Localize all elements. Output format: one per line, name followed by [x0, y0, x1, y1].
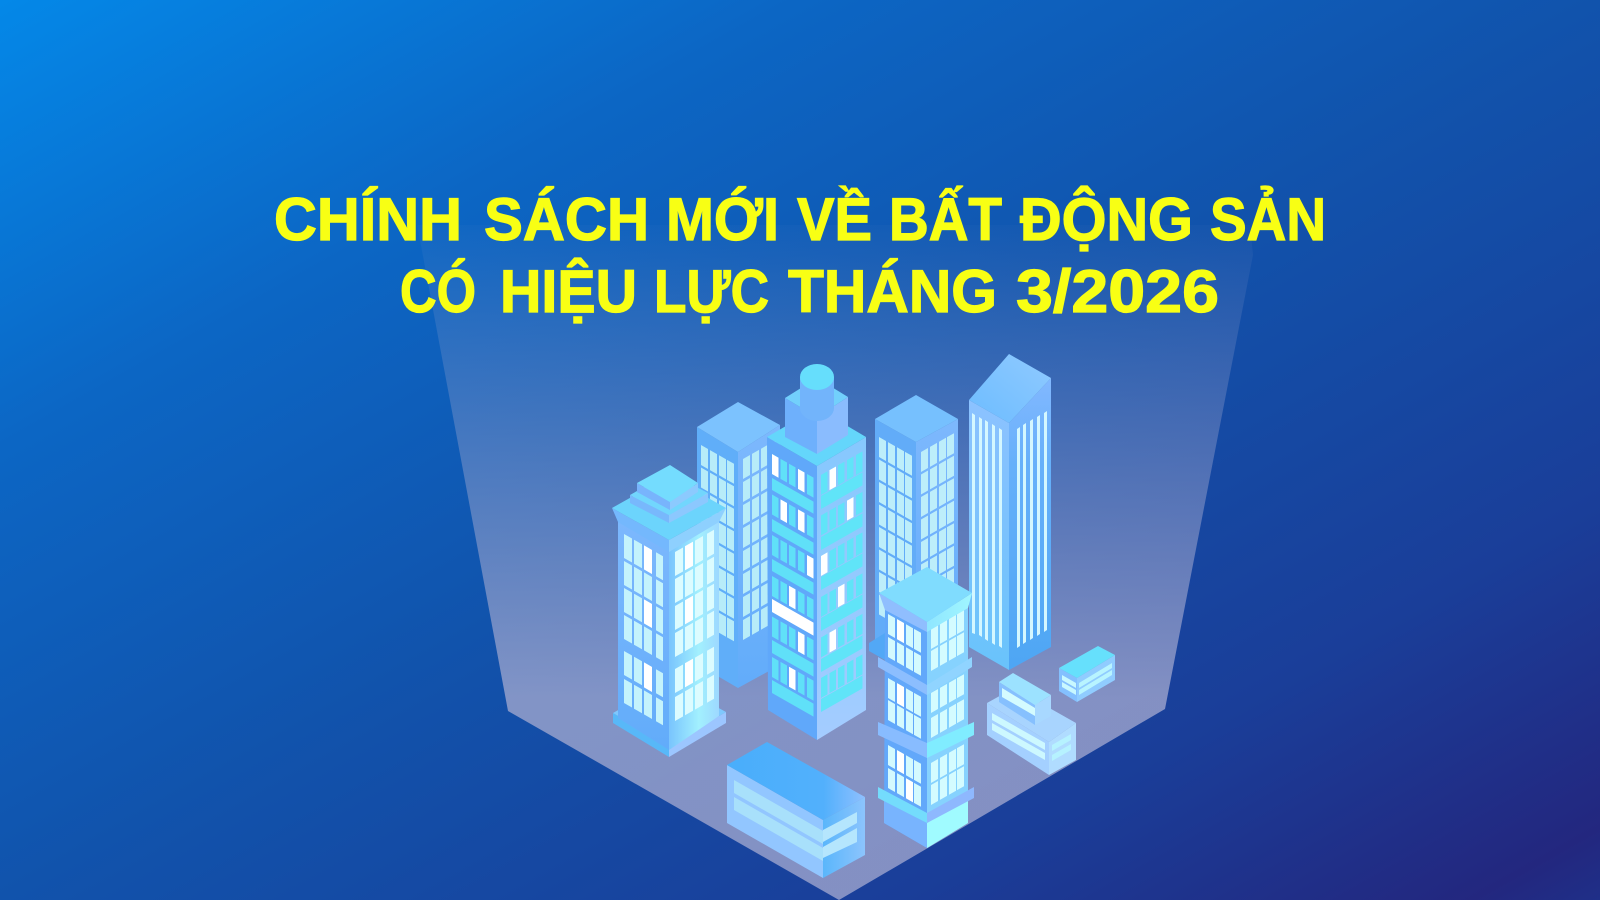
building: rear left tower [697, 402, 780, 688]
building: centre cyan tower [767, 364, 866, 740]
title: MỚI [666, 186, 779, 253]
light beam and floor [417, 225, 1253, 900]
building: front left tower [612, 465, 726, 757]
building: front stepped tower [878, 567, 974, 848]
title: HIỆU [500, 258, 637, 325]
title: ĐỘNG [1020, 186, 1193, 253]
title: 3/2026 [1016, 258, 1219, 325]
building: stepped low block [987, 673, 1076, 775]
building: low block front [727, 742, 865, 878]
title: VỀ [797, 186, 872, 253]
building: rear centre tower [869, 395, 958, 670]
city illustration [612, 354, 1115, 878]
building: small block right [1059, 646, 1115, 702]
title [274, 186, 1326, 325]
title: CHÍNH [274, 186, 462, 253]
title: CÓ [400, 258, 476, 325]
title: SẢN [1210, 186, 1326, 253]
title: LỰC [654, 258, 769, 325]
title: BẤT [889, 186, 1002, 253]
title: THÁNG [788, 258, 997, 325]
building: tall striped tower [969, 354, 1051, 670]
title: SÁCH [484, 186, 649, 253]
